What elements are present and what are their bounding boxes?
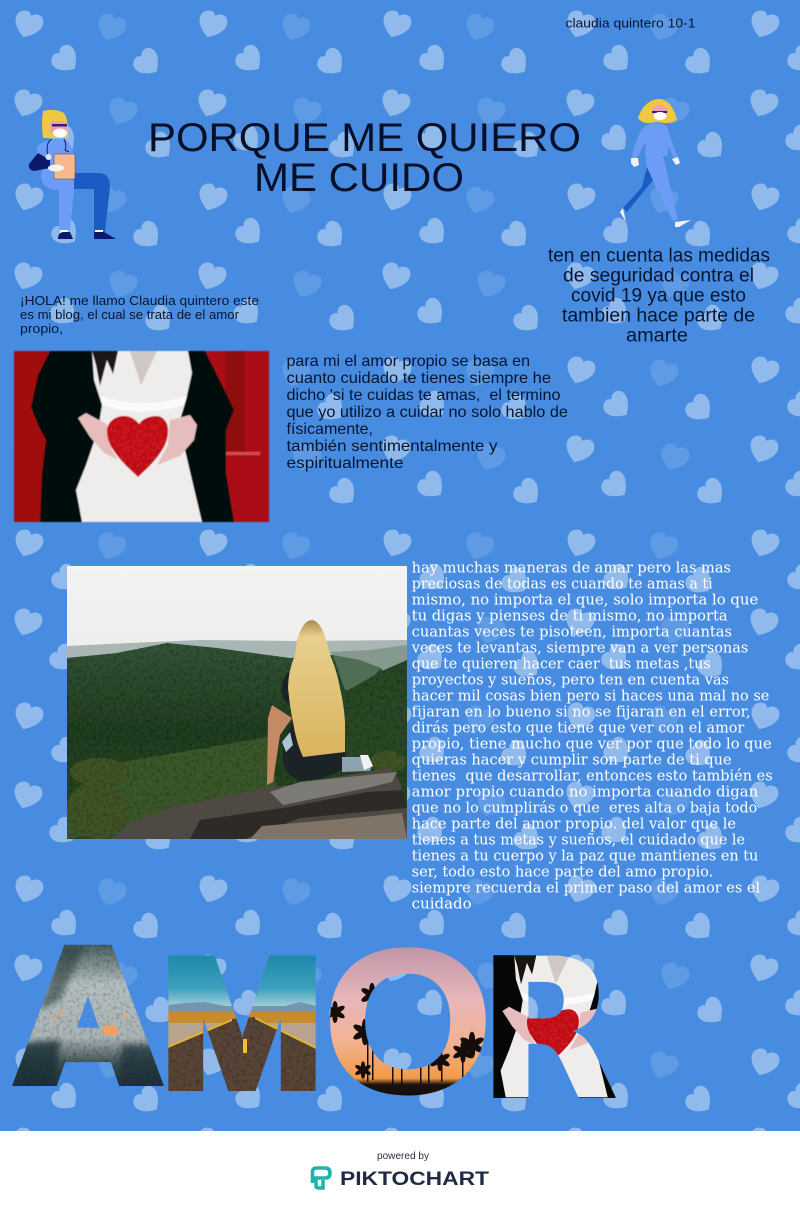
text block: main essay: preciosas de todas es cuando te amas a ti	[412, 576, 713, 592]
icon: Piktochart logo	[312, 1168, 330, 1188]
photo: blonde woman overlooking forest	[67, 566, 407, 839]
text block: main essay: ser, todo esto hace parte del amo propio.	[412, 864, 713, 880]
text block: self love definition: espiritualmente	[286, 455, 404, 472]
title	[148, 116, 581, 200]
text block: main essay: amor propio cuando no importa cuando digan	[412, 784, 758, 800]
text block: main essay: que te quieren hacer caer tus metas ,tus	[412, 656, 711, 672]
letter R: woman with heart photo	[493, 955, 616, 1098]
text block: covid safety note: tambien hace parte de	[562, 306, 755, 326]
icon: seated nurse	[29, 110, 116, 239]
text block: covid safety note	[548, 246, 770, 346]
photo lettering: AMOR	[12, 944, 616, 1098]
text block: main essay: dirás pero esto que tiene que ver con el amor	[412, 720, 744, 736]
title: PORQUE ME QUIERO	[148, 116, 581, 160]
text block: self love definition: dicho 'si te cuidas te amas, el termino	[286, 387, 561, 404]
icon: walking nurse	[620, 99, 691, 227]
text block: main essay: cuantas veces te pisoteen, importa cuantas	[412, 624, 732, 640]
letter M: desert road photo	[168, 955, 316, 1091]
letter O: sunset palms photo	[324, 945, 490, 1100]
text block: main essay: tu digas y pienses de ti mismo, no importa	[412, 608, 728, 624]
text block: main essay: fijaran en lo bueno si no se fijaran en el error,	[412, 704, 751, 720]
letter A: forest photo	[12, 944, 164, 1086]
text block: main essay: hay muchas maneras de amar pero las mas	[412, 560, 731, 576]
text block: main essay	[411, 560, 773, 912]
text block: main essay: que no lo cumplirás o que eres alta o baja todo	[412, 800, 757, 816]
text block: main essay: cuidado	[412, 896, 472, 912]
text block: main essay: mismo, no importa el que, solo importa lo que	[412, 592, 758, 608]
text block: greeting: propio,	[20, 321, 63, 336]
title: ME CUIDO	[254, 156, 464, 200]
text block: greeting: ¡HOLA! me llamo Claudia quintero este	[20, 293, 259, 308]
text block: main essay: hace parte del amor propio. del valor que le	[412, 816, 736, 832]
text block: self love definition: físicamente,	[286, 421, 373, 438]
text block: main essay: siempre recuerda el primer paso del amor es el	[412, 880, 760, 896]
text block: main essay: quieras hacer y cumplir son parte de ti que	[412, 752, 732, 768]
text block: greeting: es mi blog, el cual se trata de el amor	[20, 307, 240, 322]
text block: main essay: veces te levantas, siempre van a ver personas	[411, 640, 748, 656]
text block: main essay: tienes que desarrollar, entonces esto también es	[412, 768, 773, 784]
footer: powered by Piktochart: powered by	[377, 1151, 429, 1162]
text block: self love definition: también sentimentalmente y	[286, 438, 498, 455]
text block: main essay: tienes a tu cuerpo y la paz que mantienes en tu	[412, 848, 758, 864]
text block: self love definition: cuanto cuidado te tienes siempre he	[286, 370, 551, 387]
text block: self love definition: que yo utilizo a cuidar no solo hablo de	[286, 404, 568, 421]
text block: self love definition	[286, 353, 568, 472]
footer: powered by Piktochart	[0, 1131, 800, 1211]
text block: greeting	[20, 293, 259, 336]
text block: main essay: propio, tiene mucho que ver por que todo lo que	[412, 736, 772, 752]
text block: covid safety note: ten en cuenta las medidas	[548, 246, 770, 266]
footer: powered by Piktochart: PIKTOCHART	[340, 1169, 489, 1190]
text block: main essay: proyectos y sueños, pero ten en cuenta vas	[412, 672, 729, 688]
text block: covid safety note: de seguridad contra el	[563, 266, 754, 286]
text block: covid safety note: amarte	[626, 326, 688, 346]
text block: self love definition: para mi el amor propio se basa en	[286, 353, 530, 370]
text block: covid safety note: covid 19 ya que esto	[571, 286, 746, 306]
text block: main essay: tienes a tus metas y sueños, el cuidado que le	[412, 832, 745, 848]
author name: claudia quintero 10-1	[566, 16, 696, 30]
photo: woman holding red heart	[14, 351, 269, 522]
text block: main essay: hacer mil cosas bien pero si haces una mal no se	[412, 688, 769, 704]
